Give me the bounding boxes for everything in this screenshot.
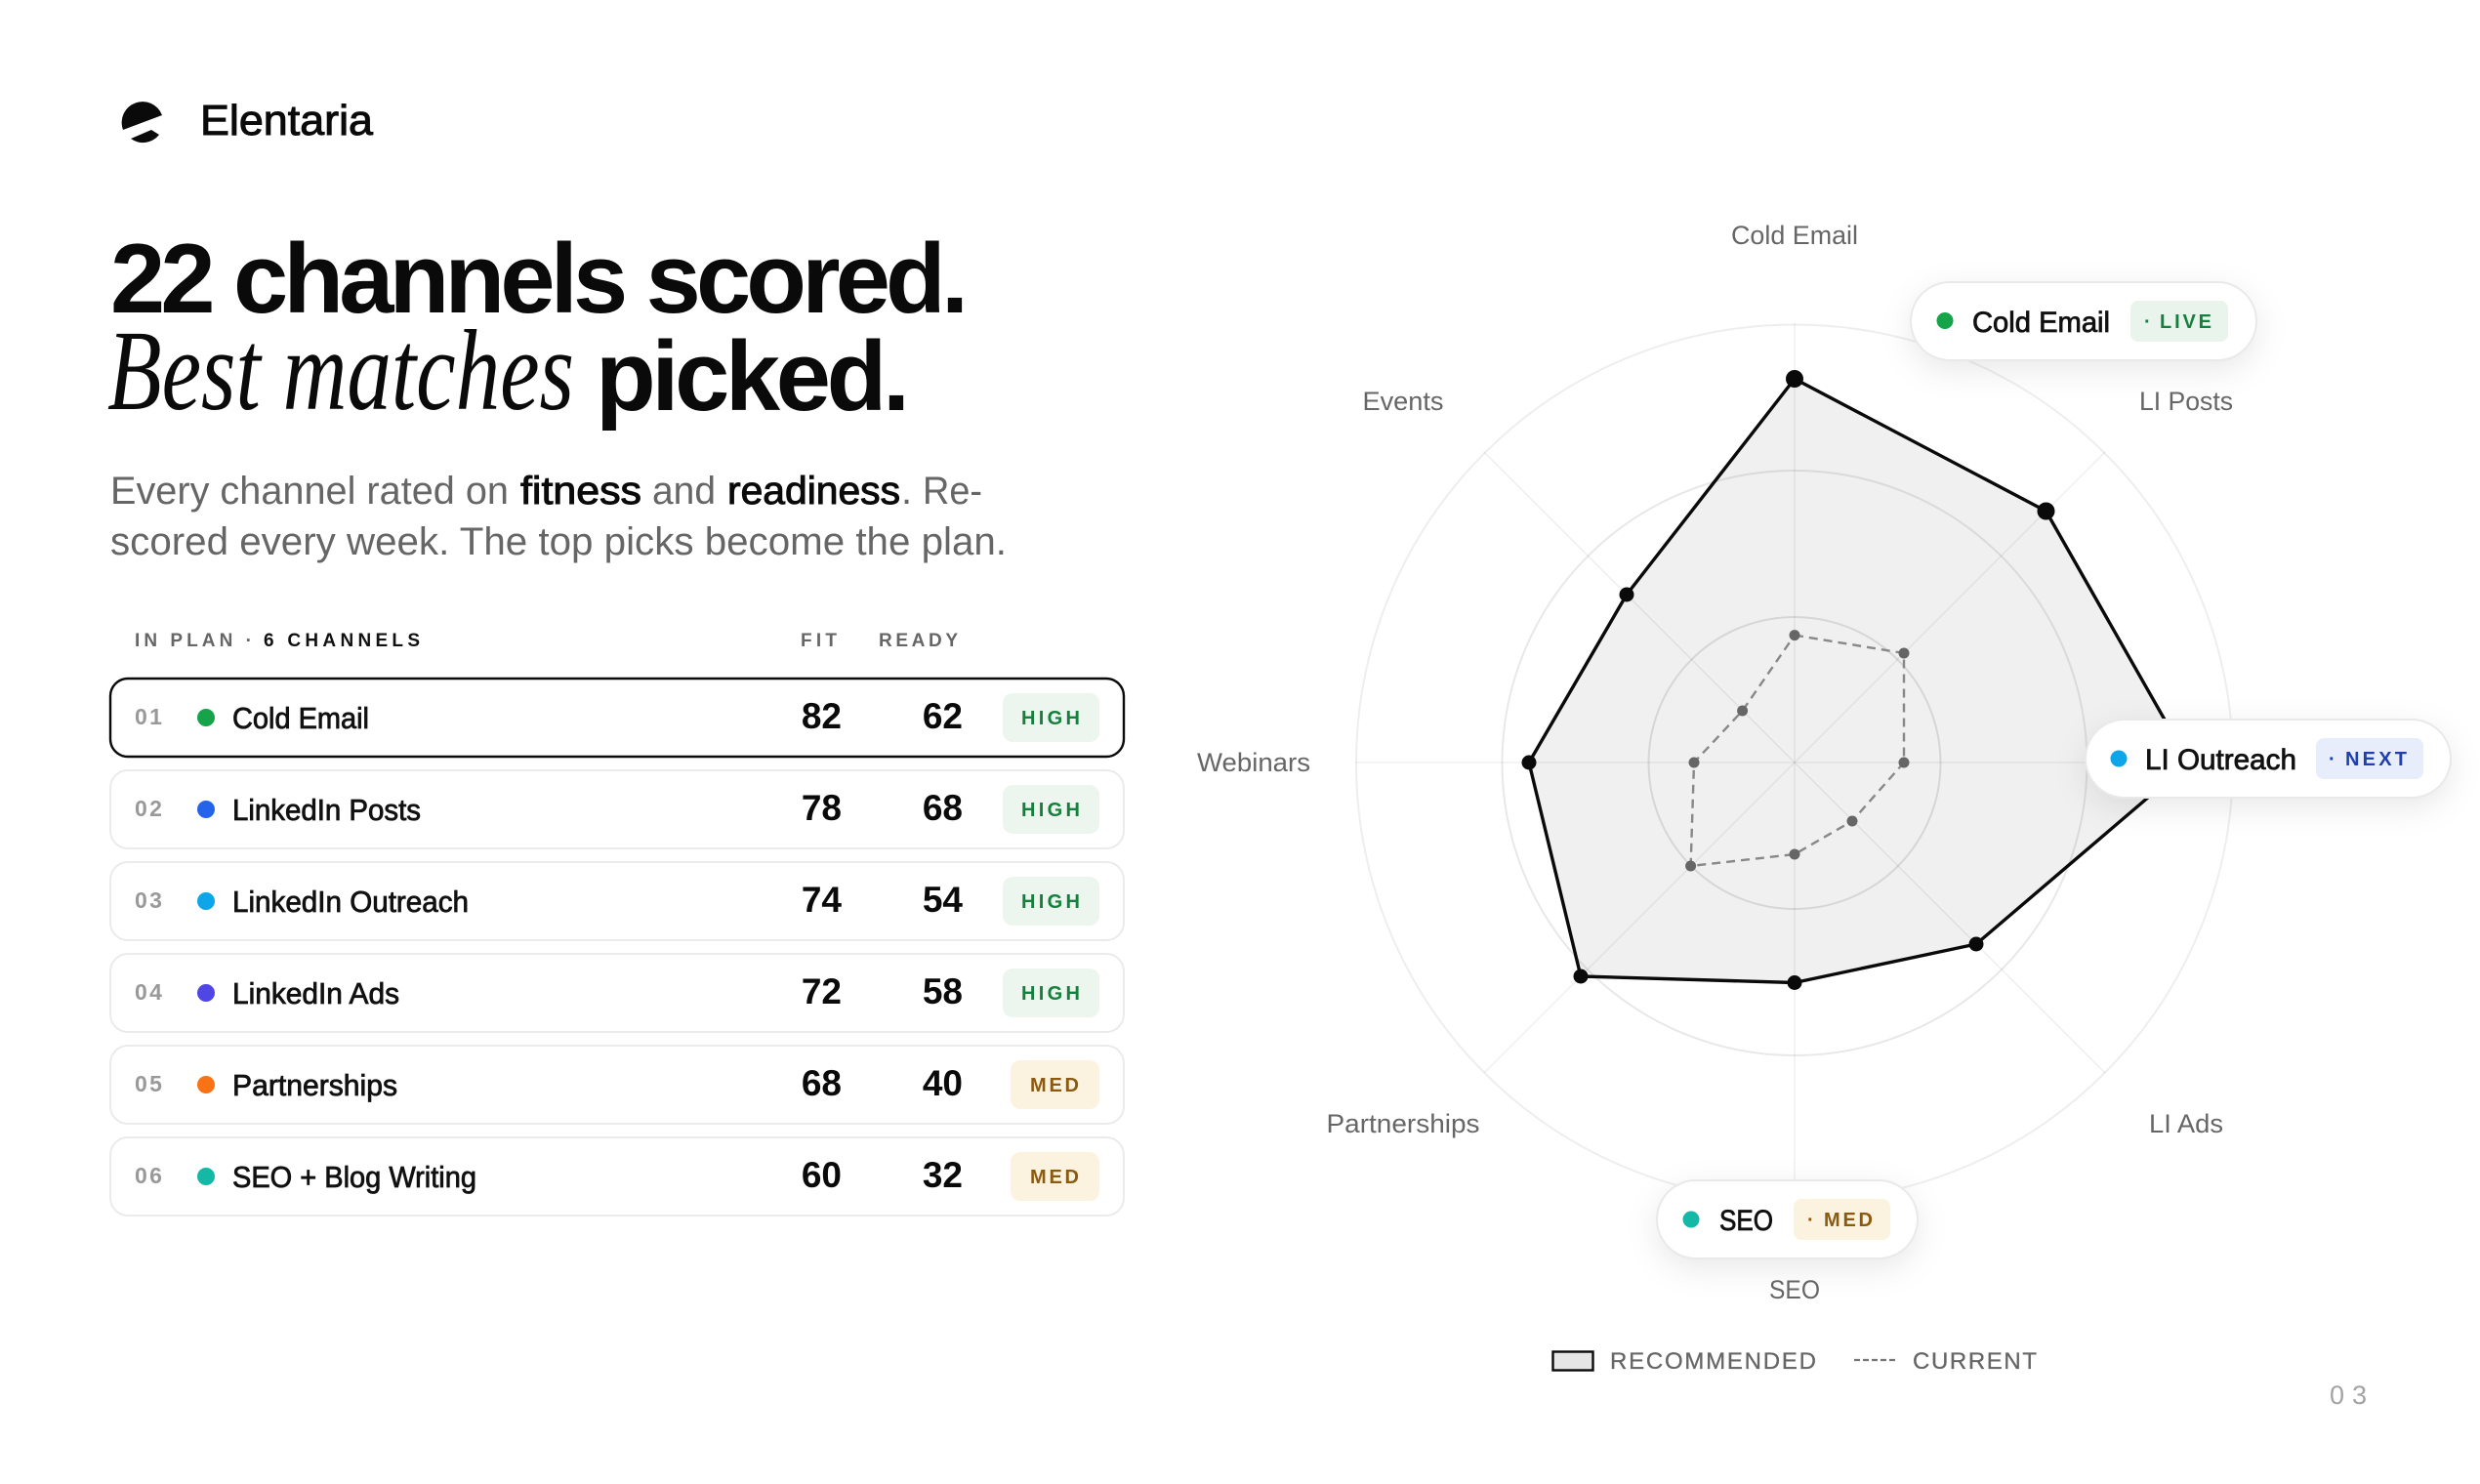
- chip: SEO: ·: [1807, 1210, 1814, 1231]
- chip: SEO: SEO: [1719, 1205, 1773, 1237]
- title line 2 bold: picked.: [596, 322, 910, 432]
- row 03 LinkedIn Outreach: 03: [135, 887, 164, 913]
- legend: [1552, 1348, 2037, 1375]
- table header: FIT: [801, 631, 837, 651]
- row 02 LinkedIn Posts: [110, 770, 1124, 848]
- axis labels: Cold Email: [1731, 221, 1858, 250]
- row 04 LinkedIn Ads: LinkedIn Ads: [232, 976, 399, 1010]
- chip: LI Outreach: NEXT: [2345, 749, 2407, 770]
- row 01 Cold Email: Cold Email: [232, 701, 369, 735]
- chip: Cold Email: [1911, 282, 2256, 370]
- chip: SEO: MED: [1824, 1210, 1873, 1231]
- row 05 Partnerships: 05: [135, 1071, 164, 1096]
- axis labels: [1197, 221, 2233, 1304]
- table header: READY: [879, 631, 958, 651]
- row 01 Cold Email: 82: [802, 696, 842, 736]
- row 02 LinkedIn Posts: 02: [135, 796, 164, 821]
- row 05 Partnerships: MED: [1030, 1075, 1079, 1096]
- chip: Cold Email: ·: [2144, 311, 2151, 333]
- grid rings: [1356, 324, 2233, 1201]
- row 04 LinkedIn Ads: 04: [135, 979, 164, 1005]
- row 01 Cold Email: [110, 679, 1124, 757]
- row 04 LinkedIn Ads: [110, 954, 1124, 1032]
- row 05 Partnerships: [110, 1046, 1124, 1124]
- row 06 SEO + Blog Writing: 06: [135, 1163, 164, 1188]
- row 02 LinkedIn Posts: LinkedIn Posts: [232, 793, 421, 827]
- legend swatch: recommended: [1552, 1351, 1593, 1371]
- brand name: Elentaria: [200, 97, 374, 144]
- chip: LI Outreach: ·: [2329, 749, 2335, 770]
- chip: Cold Email: Cold Email: [1972, 307, 2110, 339]
- subtitle: readiness: [727, 470, 900, 513]
- table rows: [110, 679, 1124, 1216]
- row 01 Cold Email: HIGH: [1021, 708, 1080, 729]
- subtitle: Every channel rated on: [110, 470, 509, 513]
- radar chart: [1197, 221, 2234, 1304]
- current points: [1685, 630, 1910, 871]
- axis labels: Partnerships: [1326, 1109, 1480, 1138]
- row 03 LinkedIn Outreach: LinkedIn Outreach: [232, 885, 469, 919]
- row 03 LinkedIn Outreach: 74: [802, 880, 842, 920]
- row 01 Cold Email: 01: [135, 704, 164, 729]
- row 06 SEO + Blog Writing: 32: [923, 1155, 963, 1195]
- axis labels: LI Posts: [2139, 387, 2233, 416]
- subtitle: and: [652, 470, 716, 513]
- current outline: [1691, 636, 1904, 866]
- row 03 LinkedIn Outreach: [110, 862, 1124, 940]
- chip: LI Outreach: LI Outreach: [2145, 744, 2296, 776]
- icon: logo mark: [122, 102, 162, 143]
- table header: IN PLAN ·: [135, 631, 252, 651]
- axis labels: LI Ads: [2149, 1109, 2223, 1138]
- row 03 LinkedIn Outreach: HIGH: [1021, 891, 1080, 913]
- title: [107, 225, 969, 434]
- chip: Cold Email: LIVE: [2160, 311, 2211, 333]
- row 01 Cold Email: 62: [923, 696, 963, 736]
- row 04 LinkedIn Ads: 58: [923, 971, 963, 1011]
- row 02 LinkedIn Posts: 68: [923, 788, 963, 828]
- chip: LI Outreach: [2086, 720, 2451, 807]
- logo: [122, 97, 374, 144]
- table header: [135, 631, 958, 651]
- row 04 LinkedIn Ads: 72: [802, 971, 842, 1011]
- table header: 6 CHANNELS: [264, 631, 420, 651]
- subtitle: Re-: [923, 470, 982, 513]
- recommended area: [1529, 379, 2189, 982]
- row 06 SEO + Blog Writing: 60: [802, 1155, 842, 1195]
- grid spokes: [1355, 323, 2234, 1202]
- subtitle: [110, 470, 1007, 563]
- row 06 SEO + Blog Writing: SEO + Blog Writing: [232, 1160, 476, 1194]
- row 05 Partnerships: Partnerships: [232, 1068, 397, 1102]
- row 03 LinkedIn Outreach: 54: [923, 880, 963, 920]
- page number: 03: [2330, 1381, 2367, 1410]
- axis labels: Events: [1363, 387, 1443, 416]
- chip: SEO: [1657, 1180, 1918, 1268]
- legend swatch: current: [1854, 1359, 1897, 1361]
- subtitle: fitness: [520, 470, 641, 513]
- row 06 SEO + Blog Writing: MED: [1030, 1167, 1079, 1188]
- row 05 Partnerships: 40: [923, 1063, 963, 1103]
- row 02 LinkedIn Posts: HIGH: [1021, 800, 1080, 821]
- legend label: recommended: RECOMMENDED: [1610, 1348, 1816, 1375]
- row 06 SEO + Blog Writing: [110, 1137, 1124, 1216]
- row 05 Partnerships: 68: [802, 1063, 842, 1103]
- axis labels: SEO: [1769, 1275, 1820, 1304]
- recommended outline: [1529, 379, 2189, 982]
- recommended points: [1521, 370, 2054, 990]
- title line 1: 22 channels scored.: [110, 225, 969, 334]
- title line 2 italic: Best matches: [107, 307, 574, 434]
- subtitle: scored every week. The top picks become the plan.: [110, 520, 1007, 563]
- subtitle: .: [901, 470, 912, 513]
- row 04 LinkedIn Ads: HIGH: [1021, 983, 1080, 1005]
- legend label: current: CURRENT: [1913, 1348, 2037, 1375]
- row 02 LinkedIn Posts: 78: [802, 788, 842, 828]
- axis labels: Webinars: [1197, 748, 1310, 777]
